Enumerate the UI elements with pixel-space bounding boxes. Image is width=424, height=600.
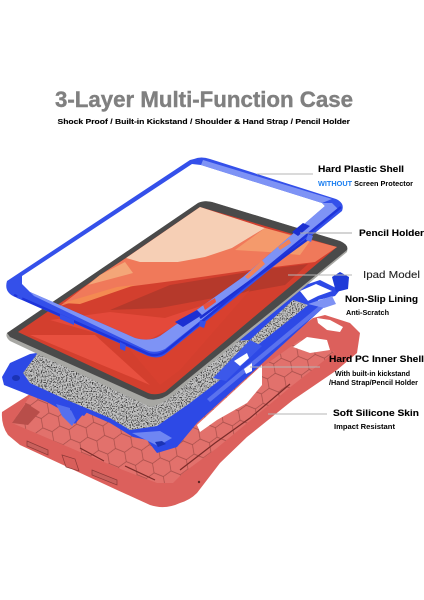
hard PC inner shell [2,280,340,453]
callout: ipad model [288,270,420,281]
frame lavender band [30,203,339,352]
callout: hard PC inner shell [250,354,424,387]
callout: soft silicone skin [268,408,419,431]
shell bottom corner tab [132,431,172,446]
inner wall shadow [12,403,40,425]
callout: soft silicone skin: Soft Silicone Skin [333,408,419,419]
soft silicone skin layer [2,315,360,507]
callout: hard plastic shell: WITHOUT Screen Protector [318,181,413,188]
knob [332,272,349,292]
callout: non-slip lining: Non-Slip Lining [345,294,418,305]
shell light strip [207,301,328,402]
lining texture [23,300,308,430]
tabs [17,292,23,300]
callout: hard plastic shell: Hard Plastic Shell [318,164,404,175]
handle ring holes [293,337,330,353]
silicone floor [12,340,335,483]
tablet body [6,201,347,407]
callout: hard PC inner shell: Hard PC Inner Shell [329,354,424,365]
slots [292,223,310,236]
dark stripe and edge [200,236,312,318]
callout: hard PC inner shell: /Hand Strap/Pencil Holder [329,380,418,387]
hard plastic shell frame [6,158,343,357]
floor grooves [80,384,290,480]
callout: non-slip lining: Anti-Scratch [346,310,389,317]
kickstand tabs [56,404,76,426]
dark bezel [7,201,347,400]
title: 3-Layer Multi-Function Case [55,87,353,112]
callout: non-slip lining [345,294,418,317]
shell strap and hole [213,340,262,381]
callout: pencil holder [300,228,424,239]
callout: pencil holder: Pencil Holder [359,228,424,239]
screen artwork [18,207,337,394]
subtitle: Shock Proof / Built-in Kickstand / Shoulder & Hand Strap / Pencil Holder [58,117,350,126]
callout: hard PC inner shell: With built-in kickstand [335,371,410,378]
white gap beside tablet [300,284,332,301]
callout: soft silicone skin: Impact Resistant [334,424,396,431]
callout: ipad model: Ipad Model [363,270,420,281]
strap slots and button [27,441,117,485]
windows showing screen [245,260,265,279]
frame body [6,158,343,357]
non-slip lining and inner shell [2,272,349,453]
ipad model [6,201,347,407]
callout: hard plastic shell [257,164,413,188]
top edge highlight [201,160,332,203]
